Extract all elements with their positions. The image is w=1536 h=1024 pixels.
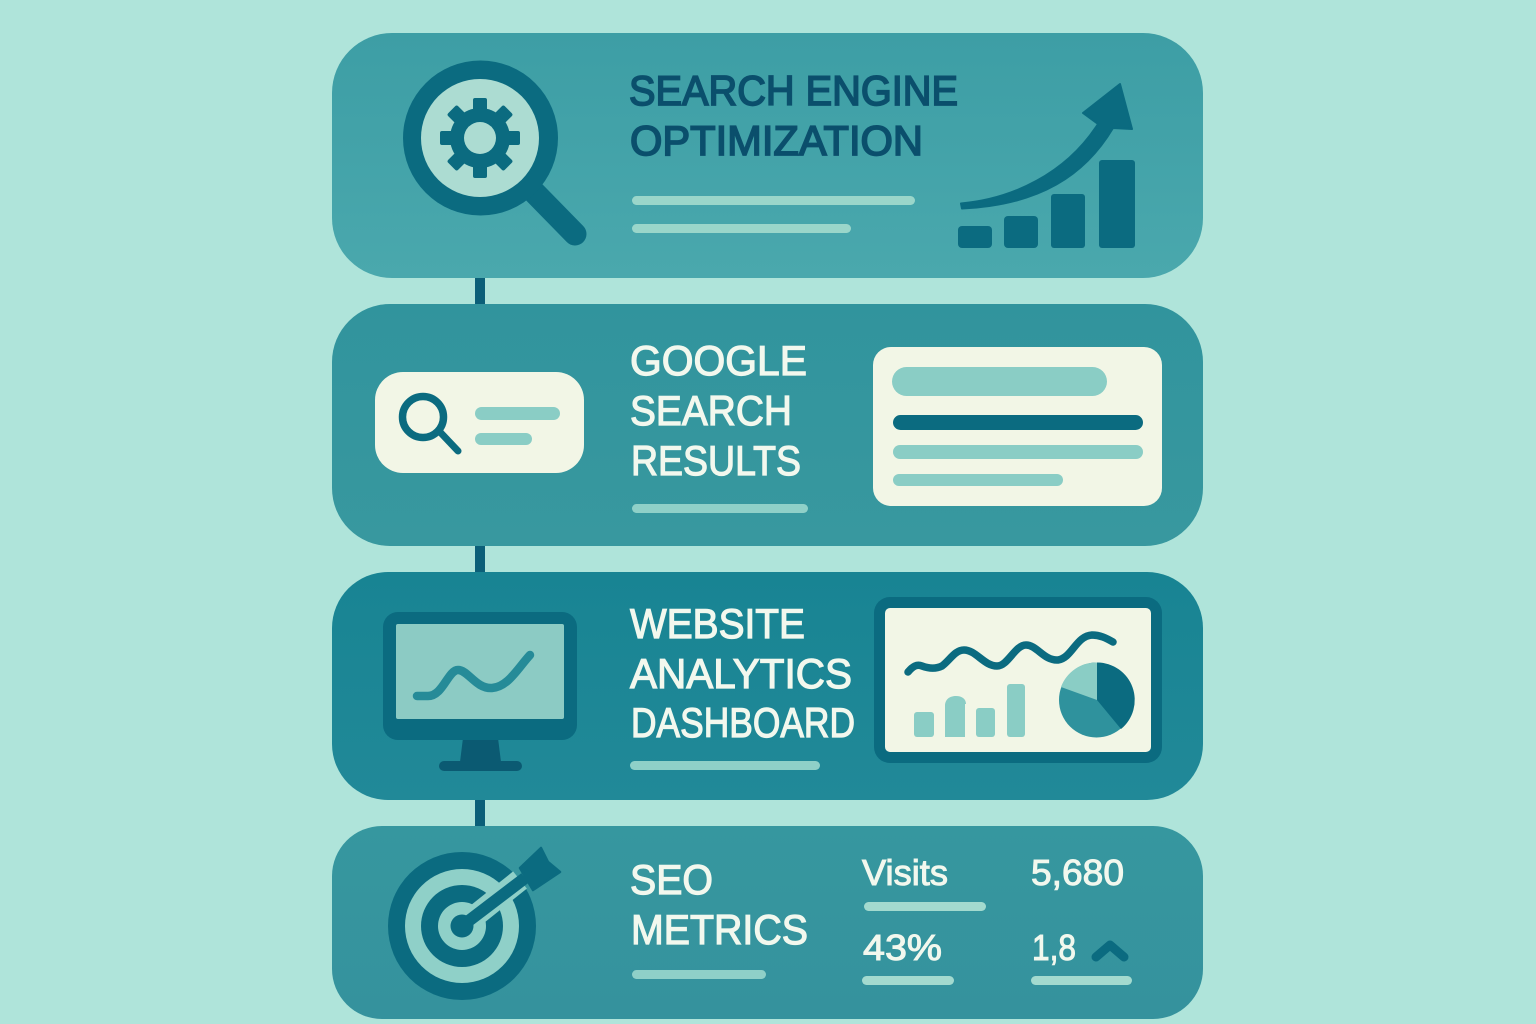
text placeholder lines [632,196,915,233]
heading: search engine optimization [629,67,958,164]
heading: search engine optimization: SEARCH ENGINE [629,67,958,114]
heading: seo metrics [630,856,808,953]
heading: google search results: SEARCH [630,387,792,434]
metric: 43% [862,927,954,985]
underline [630,761,820,770]
metric: visits [862,852,986,911]
connectors between panels [475,276,485,828]
heading: website analytics dashboard: WEBSITE [630,600,805,647]
metric: 5,680: 5,680 [1031,852,1124,893]
icon: search box [375,372,584,473]
panel: seo metrics [332,826,1203,1019]
icon: magnifier with gear [403,60,575,234]
heading: google search results [630,337,807,484]
panel: website analytics dashboard [332,572,1203,800]
heading: google search results: GOOGLE [630,337,807,384]
heading: seo metrics: SEO [630,856,713,903]
pie chart [1059,662,1135,738]
bar chart [914,684,1025,737]
metric: visits: Visits [862,852,948,893]
wavy line chart [908,635,1113,672]
underline [632,970,766,979]
icon: monitor with line chart [383,612,577,771]
metric: 43%: 43% [863,927,942,968]
panel: google search results [332,304,1203,546]
heading: website analytics dashboard [630,600,855,746]
dashboard card [874,597,1162,763]
heading: seo metrics: METRICS [631,906,808,953]
panel: search engine optimization [332,33,1203,278]
heading: search engine optimization: OPTIMIZATION [630,117,923,164]
icon: growth arrow and bars [958,84,1135,248]
results card [873,347,1162,506]
icon: target with arrow [388,848,560,1000]
heading: website analytics dashboard: ANALYTICS [630,650,852,697]
underline [632,504,808,513]
metric: 1,8 with up chevron: 1,8 [1032,927,1076,968]
heading: website analytics dashboard: DASHBOARD [631,699,855,746]
metric: 1,8 with up chevron [1031,927,1132,985]
heading: google search results: RESULTS [631,437,801,484]
